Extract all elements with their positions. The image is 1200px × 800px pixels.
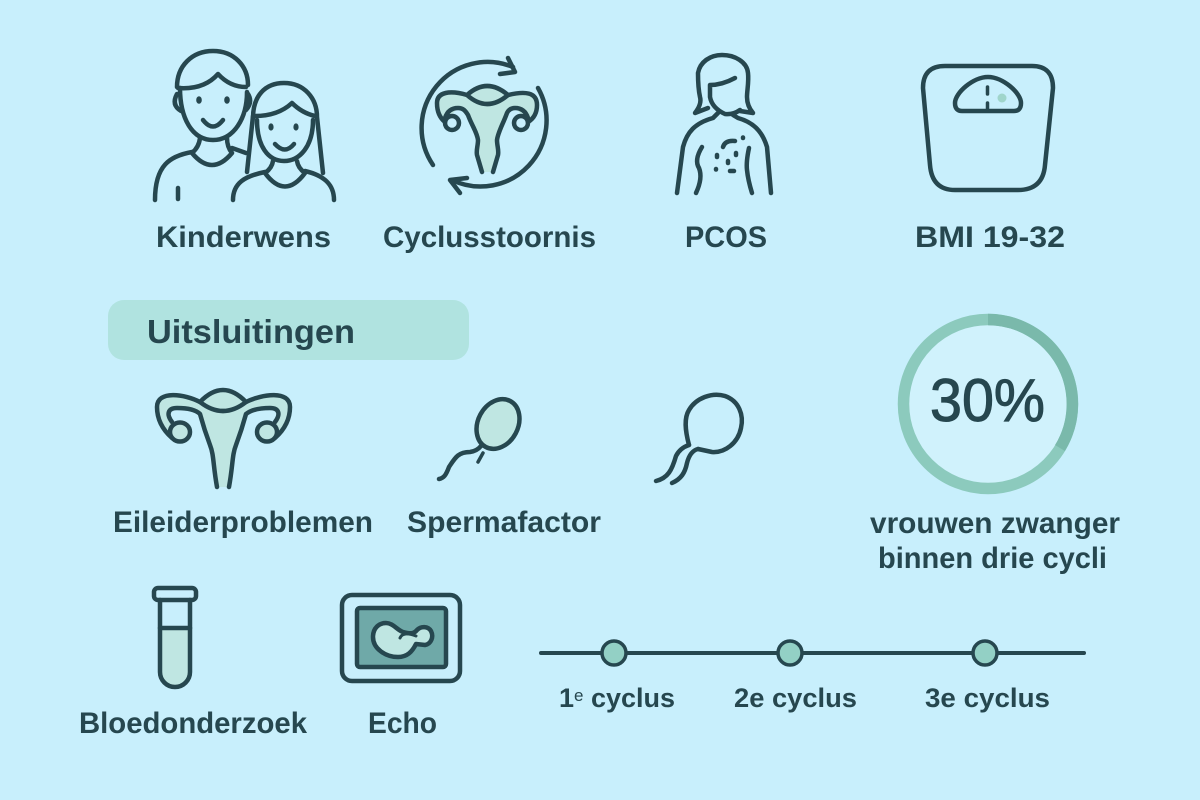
label: Kinderwens: Kinderwens	[156, 221, 331, 254]
label: Bloedonderzoek: Bloedonderzoek	[79, 707, 307, 740]
chart: 30 percent ring	[904, 320, 1072, 488]
caption: vrouwen zwanger binnen drie cycli	[870, 507, 1120, 575]
marker: cycle 3	[973, 641, 997, 665]
label: Spermafactor: Spermafactor	[407, 506, 601, 539]
label: 1e cyclus: cyclus	[583, 683, 675, 713]
label: BMI 19-32: BMI 19-32	[915, 221, 1065, 254]
label: Cyclusstoornis: Cyclusstoornis	[383, 221, 596, 254]
label: Eileiderproblemen: Eileiderproblemen	[113, 506, 373, 539]
label: Echo: Echo	[368, 707, 437, 740]
icon: woman with PCOS	[677, 55, 771, 193]
label: PCOS: PCOS	[685, 221, 767, 254]
icon: uterus	[157, 390, 290, 487]
caption: vrouwen zwanger binnen drie cycli: vrouwen zwanger	[870, 507, 1120, 540]
icon: couple	[155, 51, 334, 200]
section heading: Uitsluitingen: Uitsluitingen	[147, 313, 355, 350]
label: 2e cyclus: 2e cyclus	[734, 683, 857, 713]
marker: cycle 2	[778, 641, 802, 665]
icon: sperm cell outline	[656, 395, 742, 483]
label: 1e cyclus: 1	[559, 683, 574, 713]
chart: cycle timeline	[541, 641, 1084, 713]
chart: 30 percent ring: 30%	[930, 367, 1045, 434]
section heading: Uitsluitingen	[108, 300, 469, 360]
icon: cycle with uterus	[422, 58, 547, 193]
label: 3e cyclus: 3e cyclus	[925, 683, 1050, 713]
label: 1e cyclus: e	[574, 686, 583, 705]
icon: weighing scale	[923, 66, 1053, 190]
icon: sperm cell with fill	[439, 392, 528, 479]
marker: cycle 1	[602, 641, 626, 665]
icon: ultrasound screen	[342, 595, 460, 681]
icon: test tube	[154, 588, 196, 687]
caption: vrouwen zwanger binnen drie cycli: binnen drie cycli	[878, 542, 1107, 575]
